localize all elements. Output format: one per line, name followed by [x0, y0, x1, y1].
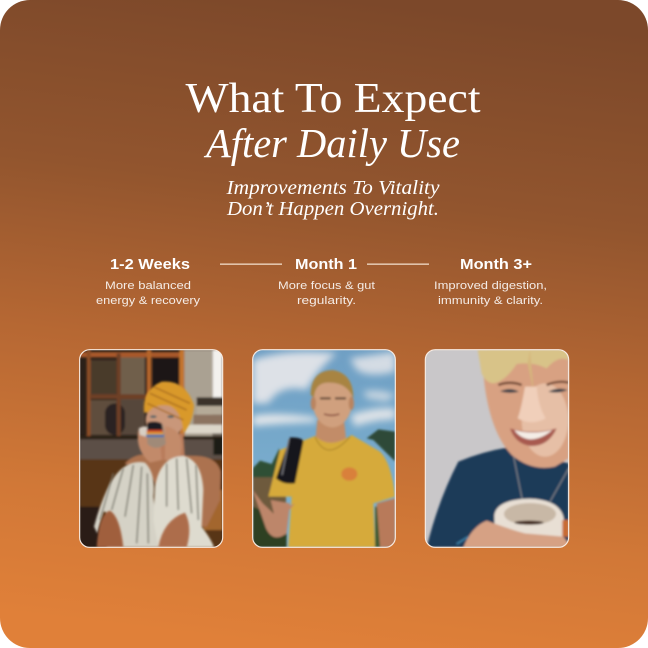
timeline column: month 3+: Month 3+ [460, 256, 532, 273]
timeline column: month 3+: Improved digestion, [434, 280, 547, 292]
title [186, 76, 481, 166]
timeline column: 1-2 weeks: energy & recovery [96, 295, 201, 307]
timeline column: month 1: Month 1 [295, 256, 357, 273]
subtitle: Don’t Happen Overnight. [226, 199, 439, 220]
photo card: smiling person holding a coffee cup [425, 350, 569, 547]
subtitle: Improvements To Vitality [225, 178, 440, 199]
photo card: man in yellow tee holding a black can [253, 350, 395, 547]
photo card: woman in turban sipping from mug [80, 350, 223, 547]
subtitle [225, 178, 440, 220]
timeline column: 1-2 weeks: 1-2 Weeks [110, 256, 190, 273]
timeline column: month 1: More focus & gut [278, 280, 375, 292]
connector line [220, 264, 282, 265]
timeline column: month 3+: immunity & clarity. [438, 295, 543, 307]
timeline column: 1-2 weeks [96, 256, 201, 307]
timeline column: month 3+ [434, 256, 547, 307]
title: What To Expect [186, 76, 481, 122]
timeline column: 1-2 weeks: More balanced [105, 280, 191, 292]
title: After Daily Use [203, 120, 460, 166]
connector line [367, 264, 429, 265]
timeline column: month 1 [278, 256, 375, 307]
timeline column: month 1: regularity. [297, 295, 356, 307]
